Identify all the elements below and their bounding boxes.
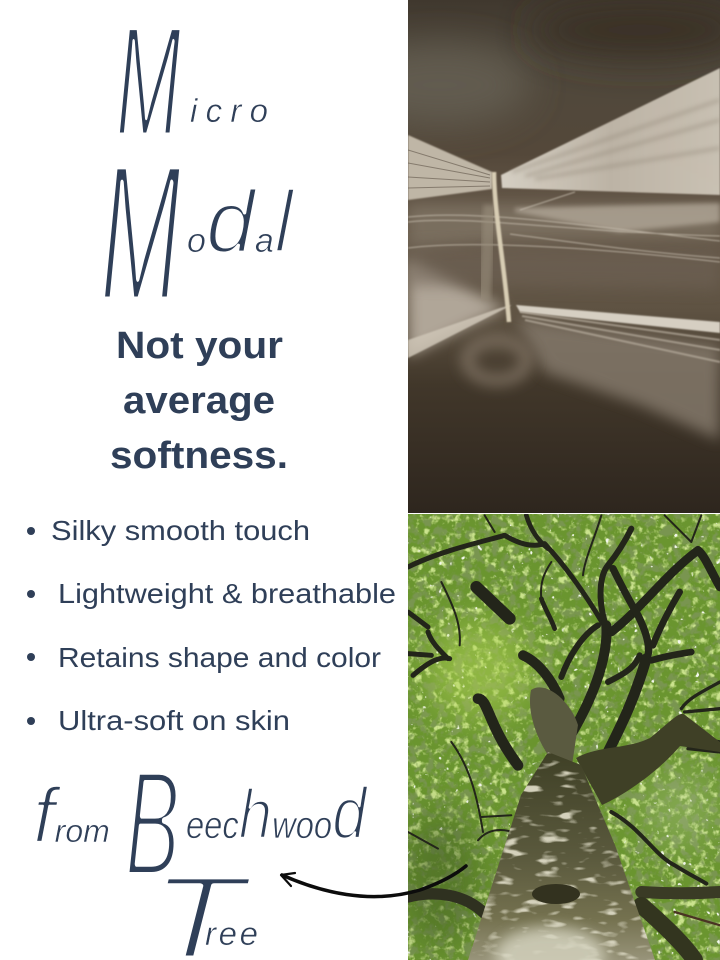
caption: from Beechwood Tree: from	[33, 771, 110, 859]
bullet list: benefits	[27, 515, 396, 736]
title word: Modal: odal	[187, 172, 296, 271]
title word: Micro	[116, 0, 268, 169]
bullet: lightweight: Lightweight & breathable	[58, 578, 396, 609]
title word: Modal	[100, 123, 296, 342]
photo: micro modal threads	[408, 0, 720, 513]
bullet: silky: Silky smooth touch	[51, 515, 310, 546]
heading: Not your average softness.: Not your	[116, 325, 283, 367]
arrow: points from tree to caption	[281, 866, 466, 897]
caption: from Beechwood Tree: ree	[205, 915, 258, 952]
heading: Not your average softness.	[110, 325, 288, 477]
caption: from Beechwood Tree: B	[125, 739, 180, 907]
heading: Not your average softness.: average	[123, 380, 275, 422]
photo: beech tree from below	[400, 514, 720, 960]
bullet: retains: Retains shape and color	[58, 642, 381, 673]
bullet: ultra-soft: Ultra-soft on skin	[58, 705, 290, 736]
title word: Modal: M	[100, 123, 182, 342]
title: Micro Modal	[100, 0, 296, 342]
heading: Not your average softness.: softness.	[110, 435, 288, 477]
caption: from Beechwood Tree	[33, 739, 369, 960]
title word: Micro: icro	[190, 92, 268, 129]
caption: from Beechwood Tree: eechwood	[186, 774, 369, 854]
